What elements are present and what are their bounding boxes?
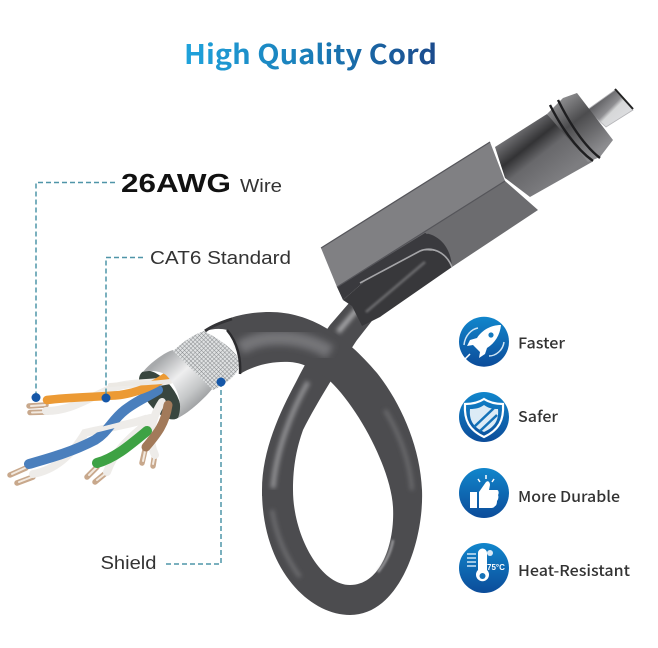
cable: back strand of the loop [262,288,396,496]
foil shield [143,350,213,418]
exposed twisted wires [10,374,170,483]
plug head [547,93,613,162]
feature: Faster [459,317,566,367]
label: CAT6 Standard: CAT6 Standard [150,247,291,268]
connector: rectangular boot and plug [321,89,633,326]
label: Shield: Shield [100,553,156,573]
USB tip [587,90,633,127]
green wire [97,431,147,463]
leader line: Shield [166,378,226,564]
title: High Quality Cord [184,33,437,72]
white wires [33,380,170,474]
boot underside [343,250,452,326]
metal barrel [495,114,592,197]
feature: More Durable: More Durable [518,486,620,507]
leader line: 26AWG [32,182,115,402]
feature: Heat-Resistant [459,543,630,593]
orange wire [47,374,170,400]
brown wire [146,405,168,447]
label: 26AWG Wire: 26AWG [121,168,231,198]
boot cut-out [337,233,452,300]
feature: Heat-Resistant: Heat-Resistant [518,560,630,581]
icon: thermometer [459,543,509,593]
label: 26AWG Wire [121,168,282,198]
icon: thumbs up [459,468,509,518]
cable: front section of the loop [205,312,422,615]
foil opening interior [131,364,189,426]
label: 26AWG Wire: Wire [240,176,282,196]
icon: rocket [459,317,509,367]
feature: Safer [459,392,559,442]
icon: thermometer: 75°C [487,563,505,572]
blue wire [29,390,158,464]
copper tips [10,405,155,483]
feature: More Durable [459,468,620,518]
icon: shield [459,392,509,442]
sealing rings [550,100,600,161]
boot lower face [337,181,538,287]
leader line: CAT6 [102,258,143,402]
feature: Safer: Safer [518,406,559,427]
boot top face [321,142,505,287]
feature: Faster: Faster [518,332,566,354]
braided shield [173,331,240,390]
